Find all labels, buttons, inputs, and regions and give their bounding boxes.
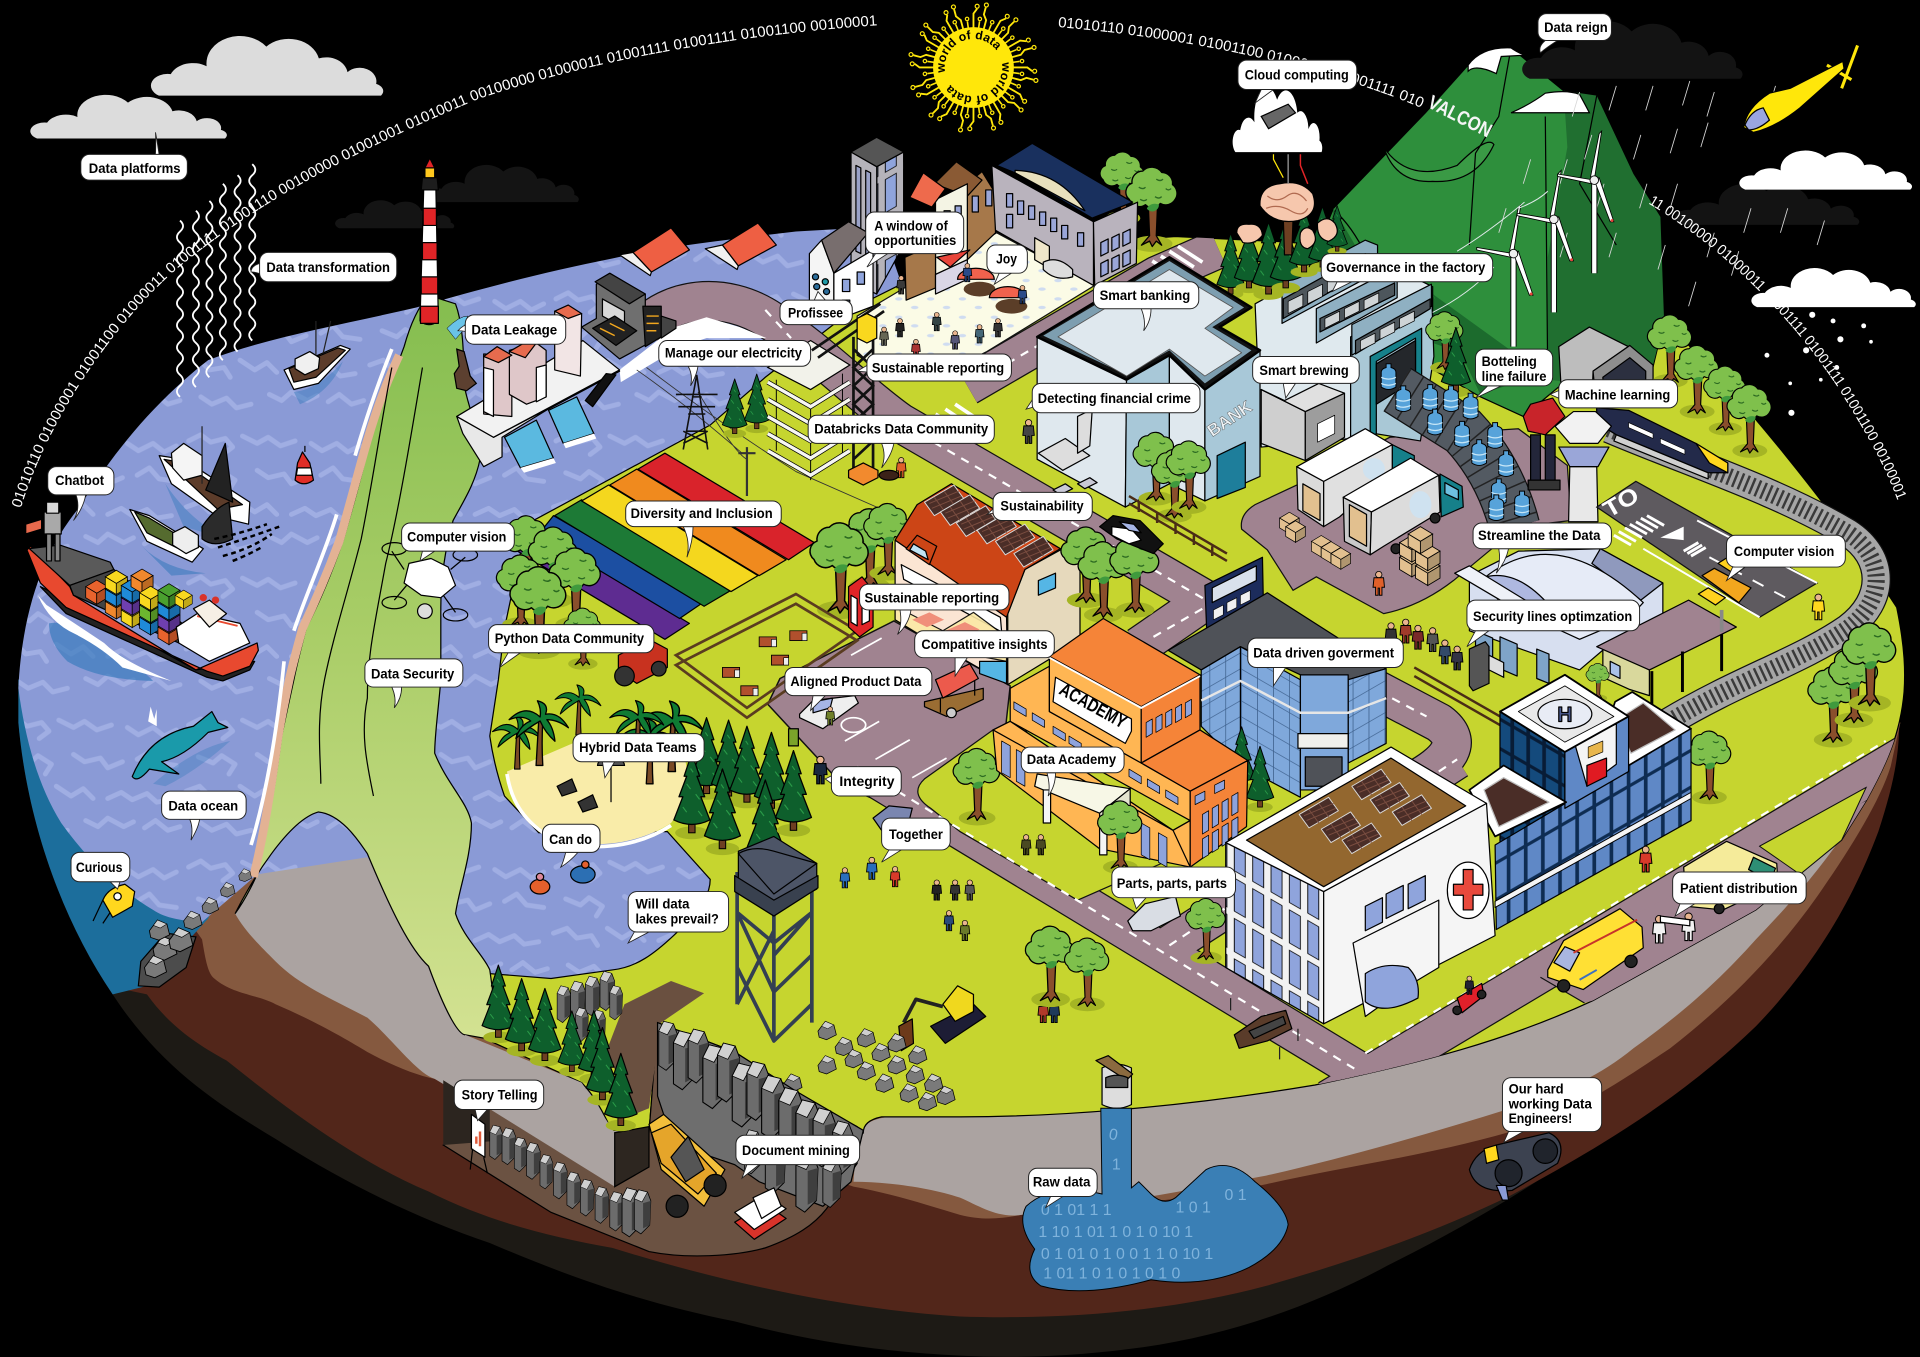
haul track xyxy=(606,981,704,1113)
label: Data transformation: Data transformation xyxy=(266,260,390,275)
label: Compatitive insights: Compatitive insights xyxy=(921,637,1048,652)
label: Can do: Can do xyxy=(549,832,592,847)
trees on the green xyxy=(953,748,1225,1011)
label: Integrity xyxy=(825,767,901,796)
bank building xyxy=(1037,257,1260,507)
sustainable house xyxy=(895,484,1080,685)
academy building xyxy=(993,618,1248,867)
label: Chatbot xyxy=(48,467,114,521)
label: Can do xyxy=(542,824,600,867)
label: Joy xyxy=(987,245,1027,284)
label: Computer vision (drone) xyxy=(402,523,514,561)
hospital tower with helipad xyxy=(1469,675,1691,930)
floating house roofs xyxy=(620,223,776,276)
rainbow fields xyxy=(516,453,814,639)
label: Python Data Community xyxy=(489,625,654,667)
label: Data reign xyxy=(1538,14,1611,53)
label: Diversity and Inclusion: Diversity and Inclusion xyxy=(631,506,773,521)
roads xyxy=(643,249,1920,1100)
rain xyxy=(1499,81,1824,306)
factory building xyxy=(1255,240,1434,447)
book stack xyxy=(735,1188,786,1239)
town square plaza xyxy=(857,233,1095,378)
label: Computer vision runway xyxy=(1727,535,1845,581)
label: Sustainable reporting lower: Sustainable reporting xyxy=(864,591,999,606)
tree at academy front xyxy=(1098,801,1142,874)
label: Machine learning xyxy=(1550,380,1678,408)
airport terminal xyxy=(1455,549,1663,683)
label: Sustainability: Sustainability xyxy=(1000,499,1084,514)
label: Data driven goverment: Data driven goverment xyxy=(1253,646,1394,661)
white clouds right xyxy=(1739,150,1916,307)
label: Computer vision runway: Computer vision xyxy=(1734,544,1834,559)
blue car parked xyxy=(873,806,912,830)
label: Cloud computing xyxy=(1238,60,1357,103)
trees behind conveyor xyxy=(1426,312,1470,397)
label: Our hard working Data Engineers!: Our hard xyxy=(1509,1082,1564,1097)
soil layer: medium brown xyxy=(196,612,1900,1218)
label: Data ocean: Data ocean xyxy=(168,799,238,814)
label: Parts, parts, parts xyxy=(1112,867,1236,909)
label: Botteling line failure xyxy=(1476,349,1553,398)
worker xyxy=(1373,571,1385,595)
pallets of crates xyxy=(1280,512,1440,585)
pasture with fence and cows xyxy=(676,594,857,718)
label: Sustainability xyxy=(987,492,1092,521)
label: Data Academy: Data Academy xyxy=(1027,752,1116,767)
label: Data Security xyxy=(365,659,463,708)
government building xyxy=(1168,593,1386,797)
label: Hybrid Data Teams xyxy=(573,734,704,778)
railway track xyxy=(1609,429,1876,723)
cafe umbrellas and visitors xyxy=(880,263,1027,358)
label: Document mining: Document mining xyxy=(742,1143,850,1158)
transmission tower xyxy=(676,375,718,450)
label: Will data lakes prevail?: lakes prevail? xyxy=(636,911,719,926)
label: Botteling line failure: line failure xyxy=(1482,369,1547,384)
clouds: upper left xyxy=(30,36,383,138)
robot with megaphone xyxy=(26,502,61,561)
fence by bank xyxy=(1129,496,1227,561)
label: Smart banking xyxy=(1093,282,1199,331)
trees in front of bank xyxy=(1133,432,1210,523)
label: Curious: Curious xyxy=(76,860,123,875)
label: Governance in the factory xyxy=(1321,254,1493,292)
brewing boiler block xyxy=(1261,383,1344,461)
lighthouse xyxy=(420,158,438,325)
hospital tower with helipad: H xyxy=(1557,703,1572,726)
trees at field side xyxy=(810,504,910,619)
sea: water surface xyxy=(18,227,931,1102)
dam with transformer xyxy=(457,273,767,473)
label: Sustainable reporting top: Sustainable reporting xyxy=(872,360,1004,375)
crosswalk at town square xyxy=(936,246,1202,429)
label: Detecting financial crime xyxy=(1026,383,1200,413)
label: Document mining xyxy=(736,1135,860,1178)
red phone booth xyxy=(849,577,873,637)
label: Diversity and Inclusion xyxy=(626,501,781,557)
icon: sun world of data: world of data xyxy=(938,30,1000,73)
wind swirls xyxy=(1433,191,1548,312)
label: Story Telling xyxy=(454,1080,544,1121)
lime land surface xyxy=(490,236,1905,1133)
icon: sun world of data xyxy=(908,2,1038,132)
mountain with VALCON lettering xyxy=(1298,48,1664,416)
raw data stream and lake: 1 01 1 0 1 0 1 0 1 0 xyxy=(1043,1265,1181,1282)
icon: sun world of data: world of data xyxy=(947,62,1009,105)
pine behind factory xyxy=(1217,206,1347,300)
label: Patient distribution xyxy=(1673,872,1806,916)
raw data stream and lake: 0 1 01 1 1 xyxy=(1041,1202,1112,1219)
well xyxy=(1096,1056,1133,1108)
label: Our hard working Data Engineers!: Engineers! xyxy=(1509,1111,1572,1126)
label: Computer vision (drone): Computer vision xyxy=(407,529,506,544)
label: A window of opportunities: opportunities xyxy=(874,233,957,248)
cloud computing cloud with wires xyxy=(1232,86,1323,184)
fishing boat top xyxy=(284,321,350,404)
binary data arc left: 01010110 01000001 01001100 01000011 01001111 01001110 00100000 01001001 01010011 00100000 01000011 01001111 01001111 01001100 00100001 xyxy=(12,15,877,507)
swimmers in tubes xyxy=(530,861,595,894)
road: lower service band xyxy=(1538,801,1866,1003)
dark rain clouds xyxy=(1522,21,1859,225)
construction frame building xyxy=(768,341,850,480)
pines by government xyxy=(1228,727,1274,812)
town hall xyxy=(992,143,1138,285)
parking markings xyxy=(808,638,947,778)
label: Data transformation xyxy=(251,252,397,282)
label: Databricks Data Community xyxy=(808,415,994,468)
label: Data Security: Data Security xyxy=(371,667,455,682)
trees around tunnel xyxy=(1647,315,1771,458)
control tower xyxy=(1555,412,1611,522)
tower crane xyxy=(812,304,884,485)
label: Smart brewing xyxy=(1253,356,1359,398)
ACADEMY sign lettering: ACADEMY xyxy=(1056,678,1130,732)
trawler and net xyxy=(159,426,250,544)
red tractor xyxy=(615,639,667,686)
label: Sustainable reporting top xyxy=(857,354,1011,381)
label: A window of opportunities: A window of xyxy=(874,218,948,233)
disk: dark base rim xyxy=(18,490,1905,1357)
lime patch below ambulance xyxy=(1760,787,1866,874)
label: Curious xyxy=(71,852,130,889)
delivery trucks xyxy=(1297,429,1463,555)
label: Sustainable reporting lower xyxy=(860,584,1009,634)
buoy xyxy=(295,446,313,484)
label: Manage our electricity: Manage our electricity xyxy=(665,346,802,361)
grey block face xyxy=(443,1035,615,1187)
icon: yellow helicopter xyxy=(1744,45,1858,132)
rock rubble xyxy=(784,1021,955,1111)
cyber thief and rubble xyxy=(1023,409,1097,495)
shoreline rocks xyxy=(138,869,252,987)
label: Data ocean xyxy=(162,791,246,840)
Dutch houses xyxy=(905,162,996,300)
track worker xyxy=(1812,594,1825,620)
fish school xyxy=(214,524,279,561)
police car xyxy=(1100,516,1163,554)
label: Security lines optimzation: Security lines optimzation xyxy=(1473,609,1632,624)
label: Machine learning: Machine learning xyxy=(1565,387,1670,402)
label: Governance in the factory: Governance in the factory xyxy=(1326,260,1486,275)
label: Streamline the Data: Streamline the Data xyxy=(1478,528,1601,543)
calculator building xyxy=(1205,557,1264,647)
label: Security lines optimzation xyxy=(1467,600,1640,647)
peninsula ridge lines and beach xyxy=(251,349,422,877)
label: Data driven goverment xyxy=(1248,638,1403,686)
label: Python Data Community: Python Data Community xyxy=(495,631,644,646)
label: Aligned Product Data: Aligned Product Data xyxy=(790,674,922,689)
label: Profissee xyxy=(780,292,852,325)
label: Will data lakes prevail?: Will data xyxy=(636,897,690,912)
label: Data reign: Data reign xyxy=(1544,20,1608,35)
trees by house xyxy=(1061,527,1159,623)
label: Hybrid Data Teams: Hybrid Data Teams xyxy=(579,740,697,755)
raw data stream and lake: 0 1 01 0 1 0 0 1 1 0 10 1 xyxy=(1041,1246,1213,1263)
food truck xyxy=(924,664,983,718)
lime patch by academy xyxy=(918,730,1224,900)
worker with wheelbarrow xyxy=(879,457,906,480)
label: Compatitive insights xyxy=(915,631,1054,676)
raw data stream and lake: 1 10 1 01 1 0 1 0 10 1 xyxy=(1038,1224,1193,1241)
upper rock outcrop xyxy=(557,971,623,1044)
raw data stream and lake: 0 1 xyxy=(1224,1187,1247,1204)
ambulance pale xyxy=(1684,841,1778,914)
tunnel wall xyxy=(443,1080,490,1145)
label: Integrity: Integrity xyxy=(839,774,895,789)
transformer robot xyxy=(1523,398,1565,490)
ambulance yellow xyxy=(1548,909,1643,992)
motorcycle xyxy=(1453,976,1486,1015)
label: Profissee: Profissee xyxy=(788,305,843,320)
peninsula xyxy=(235,295,500,1041)
label: Raw data xyxy=(1029,1168,1097,1207)
story telling easel xyxy=(470,1114,487,1173)
small green boat xyxy=(130,510,206,576)
corner house xyxy=(809,222,873,321)
bank building: BANK xyxy=(1203,396,1256,441)
camera on runway xyxy=(1698,557,1751,632)
electricity wires xyxy=(637,367,888,512)
trees right side xyxy=(1586,623,1896,804)
label: Data platforms: Data platforms xyxy=(89,161,181,176)
hospital building xyxy=(1226,747,1495,1024)
dark clouds behind lighthouse xyxy=(335,165,579,228)
soil layer: dark brown xyxy=(113,612,1899,1317)
label: Together xyxy=(882,818,950,862)
label: Data platforms xyxy=(81,132,187,180)
road lower edge lines xyxy=(1540,787,1866,1003)
pine forest xyxy=(674,718,811,866)
label: Cloud computing: Cloud computing xyxy=(1245,68,1349,83)
dump truck xyxy=(649,1114,726,1217)
label: Together: Together xyxy=(889,827,943,842)
factory yard xyxy=(1241,429,1571,614)
binary data arc right top: 01010110 01000001 01001100 01000011 01001111 010 xyxy=(1058,17,1424,107)
drone xyxy=(382,543,478,621)
raw data stream and lake xyxy=(1023,1108,1288,1291)
raw data stream and lake: 1 0 1 xyxy=(1176,1199,1211,1216)
label: Smart banking: Smart banking xyxy=(1100,288,1190,303)
label: Our hard working Data Engineers!: working Data xyxy=(1508,1096,1592,1111)
grey car xyxy=(1128,896,1180,931)
watchtower xyxy=(735,836,818,1041)
soccer players and crowd xyxy=(840,835,1060,1023)
runway xyxy=(1597,481,1817,617)
label: Patient distribution: Patient distribution xyxy=(1680,881,1798,896)
label: A window of opportunities xyxy=(866,212,964,267)
pine pair xyxy=(722,374,769,438)
label: Data Academy xyxy=(1021,747,1124,796)
excavator xyxy=(899,986,986,1051)
label: Raw data: Raw data xyxy=(1033,1175,1091,1190)
people near integrity xyxy=(814,707,835,784)
container ship xyxy=(27,545,258,681)
label: Data Leakage xyxy=(458,315,566,344)
mining area: soil floor xyxy=(443,1023,857,1256)
label: Will data lakes prevail? xyxy=(628,892,729,943)
wind turbines xyxy=(1477,131,1614,347)
binary data arc right lower: 11 00100000 01000011 01001111 01001111 01001100 00100001 xyxy=(1649,196,1906,500)
trees by town hall xyxy=(1100,152,1177,252)
road centre dashes xyxy=(765,276,1886,1072)
skyscraper xyxy=(851,137,904,294)
rock layer: grey xyxy=(235,723,1897,1215)
parked car and charger xyxy=(789,696,858,746)
sea: deep rim xyxy=(18,612,282,994)
high speed train xyxy=(1597,408,1728,479)
yellow submarine xyxy=(93,884,135,923)
label: Botteling line failure: Botteling xyxy=(1482,354,1537,369)
label: Streamline the Data xyxy=(1473,523,1611,573)
pole xyxy=(738,447,756,496)
grove by lake xyxy=(496,516,601,670)
palm trees and beach furniture xyxy=(492,685,703,812)
data engineer and pipes xyxy=(1469,1133,1561,1200)
label: Joy: Joy xyxy=(996,251,1017,266)
label: Aligned Product Data xyxy=(785,667,932,710)
sand beach xyxy=(507,742,692,847)
raw data stream and lake: 0 xyxy=(1107,1126,1119,1144)
wavy data lines: data transformation xyxy=(177,164,255,397)
runway: TO xyxy=(1598,482,1643,522)
conveyor belt with bottles xyxy=(1381,364,1529,527)
boarding shelter xyxy=(1597,600,1736,704)
label: Data Leakage: Data Leakage xyxy=(471,322,558,337)
left cliff columns xyxy=(490,1125,651,1237)
label: Our hard working Data Engineers! xyxy=(1502,1078,1602,1143)
whale xyxy=(132,707,230,786)
pedestrian red xyxy=(1640,846,1652,872)
road crack and bollards xyxy=(1231,998,1298,1059)
statue mermaid xyxy=(454,349,476,391)
splash by lighthouse xyxy=(447,316,468,339)
brain tree xyxy=(1237,183,1337,255)
passengers and security gate xyxy=(1385,619,1504,725)
medics with stretcher xyxy=(1653,913,1695,943)
tunnel xyxy=(1559,327,1653,410)
label: Detecting financial crime: Detecting financial crime xyxy=(1038,391,1191,406)
label: Smart brewing: Smart brewing xyxy=(1259,363,1349,378)
label: Chatbot: Chatbot xyxy=(55,473,104,488)
raw data stream and lake: 1 xyxy=(1112,1157,1121,1174)
label: Story Telling: Story Telling xyxy=(462,1088,538,1103)
mountain with VALCON lettering: VALCON xyxy=(1424,92,1495,142)
label: Databricks Data Community: Databricks Data Community xyxy=(814,422,989,437)
lower-left pines xyxy=(482,965,637,1131)
snow dots xyxy=(1764,312,1873,416)
label: Manage our electricity xyxy=(659,341,811,386)
label: Parts, parts, parts: Parts, parts, parts xyxy=(1117,876,1227,891)
grey cliff of the mine xyxy=(658,1021,863,1212)
